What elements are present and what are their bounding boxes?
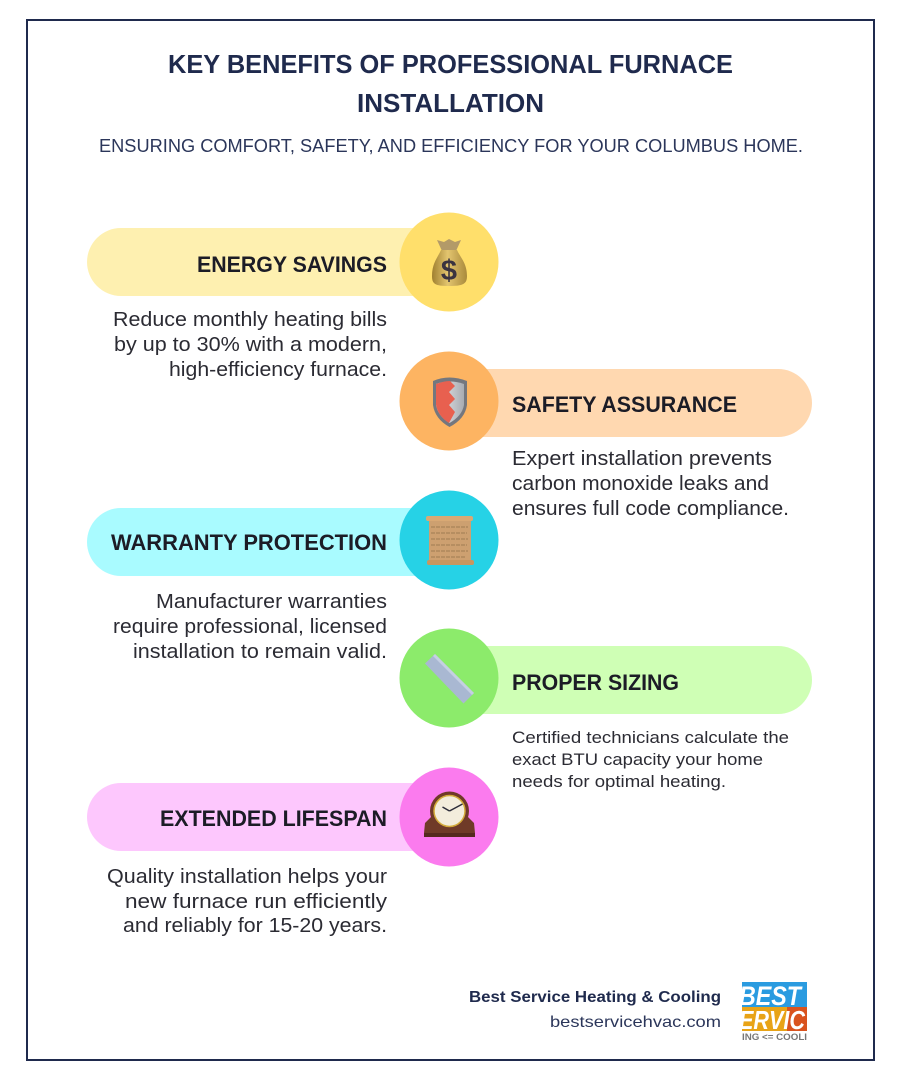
extended lifespan description [107, 866, 387, 937]
safety assurance circle [400, 352, 498, 450]
safety assurance description: ensures full code compliance. [512, 498, 789, 520]
extended lifespan heading: EXTENDED LIFESPAN [160, 806, 387, 831]
energy savings description [113, 309, 387, 381]
warranty protection circle [400, 490, 498, 590]
proper sizing heading: PROPER SIZING [512, 670, 679, 695]
extended lifespan description: new furnace run efficiently [125, 891, 387, 913]
warranty protection description [113, 591, 387, 663]
warranty protection description: require professional, licensed [113, 616, 387, 638]
panel: proper sizing [400, 628, 812, 791]
safety assurance description: Expert installation prevents [512, 448, 772, 470]
icon: ruler [425, 654, 474, 704]
proper sizing description [512, 728, 789, 791]
title: INSTALLATION [357, 88, 544, 118]
warranty protection heading: WARRANTY PROTECTION [111, 530, 387, 555]
warranty protection description: Manufacturer warranties [156, 591, 387, 613]
proper sizing circle [400, 628, 498, 728]
logo: ING <= COOLI [742, 1032, 807, 1042]
subtitle: ENSURING COMFORT, SAFETY, AND EFFICIENCY FOR YOUR COLUMBUS HOME. [99, 136, 803, 156]
proper sizing pill [449, 646, 812, 714]
title: KEY BENEFITS OF PROFESSIONAL FURNACE [168, 49, 733, 79]
proper sizing description: exact BTU capacity your home [512, 750, 763, 769]
icon: shield [433, 378, 467, 427]
extended lifespan circle [400, 768, 498, 866]
energy savings description: high-efficiency furnace. [169, 359, 387, 381]
icon: money bag: $ [441, 255, 457, 287]
icon: mantel clock [424, 792, 475, 837]
icon: scroll [426, 516, 474, 565]
proper sizing description: needs for optimal heating. [512, 772, 726, 791]
safety assurance description: carbon monoxide leaks and [512, 473, 769, 495]
icon: money bag [432, 239, 467, 287]
safety assurance heading: SAFETY ASSURANCE [512, 392, 737, 417]
logo [739, 981, 807, 1042]
energy savings heading: ENERGY SAVINGS [197, 252, 387, 277]
energy savings description: Reduce monthly heating bills [113, 309, 387, 331]
warranty protection description: installation to remain valid. [133, 641, 387, 663]
footer website: bestservicehvac.com [550, 1014, 721, 1031]
footer company name: Best Service Heating & Cooling [469, 989, 721, 1006]
safety assurance pill [449, 369, 812, 437]
panel: extended lifespan [87, 768, 498, 937]
safety assurance description [512, 448, 789, 520]
proper sizing description: Certified technicians calculate the [512, 728, 789, 747]
extended lifespan description: Quality installation helps your [107, 866, 387, 888]
energy savings pill [87, 228, 449, 296]
panel: warranty protection [87, 490, 498, 663]
panel: safety assurance [400, 352, 812, 520]
panel: energy savings [87, 212, 499, 381]
extended lifespan pill [87, 783, 449, 851]
energy savings description: by up to 30% with a modern, [114, 334, 387, 356]
warranty protection pill [87, 508, 449, 576]
energy savings circle [400, 212, 498, 312]
extended lifespan description: and reliably for 15-20 years. [123, 915, 387, 937]
title [168, 49, 733, 118]
